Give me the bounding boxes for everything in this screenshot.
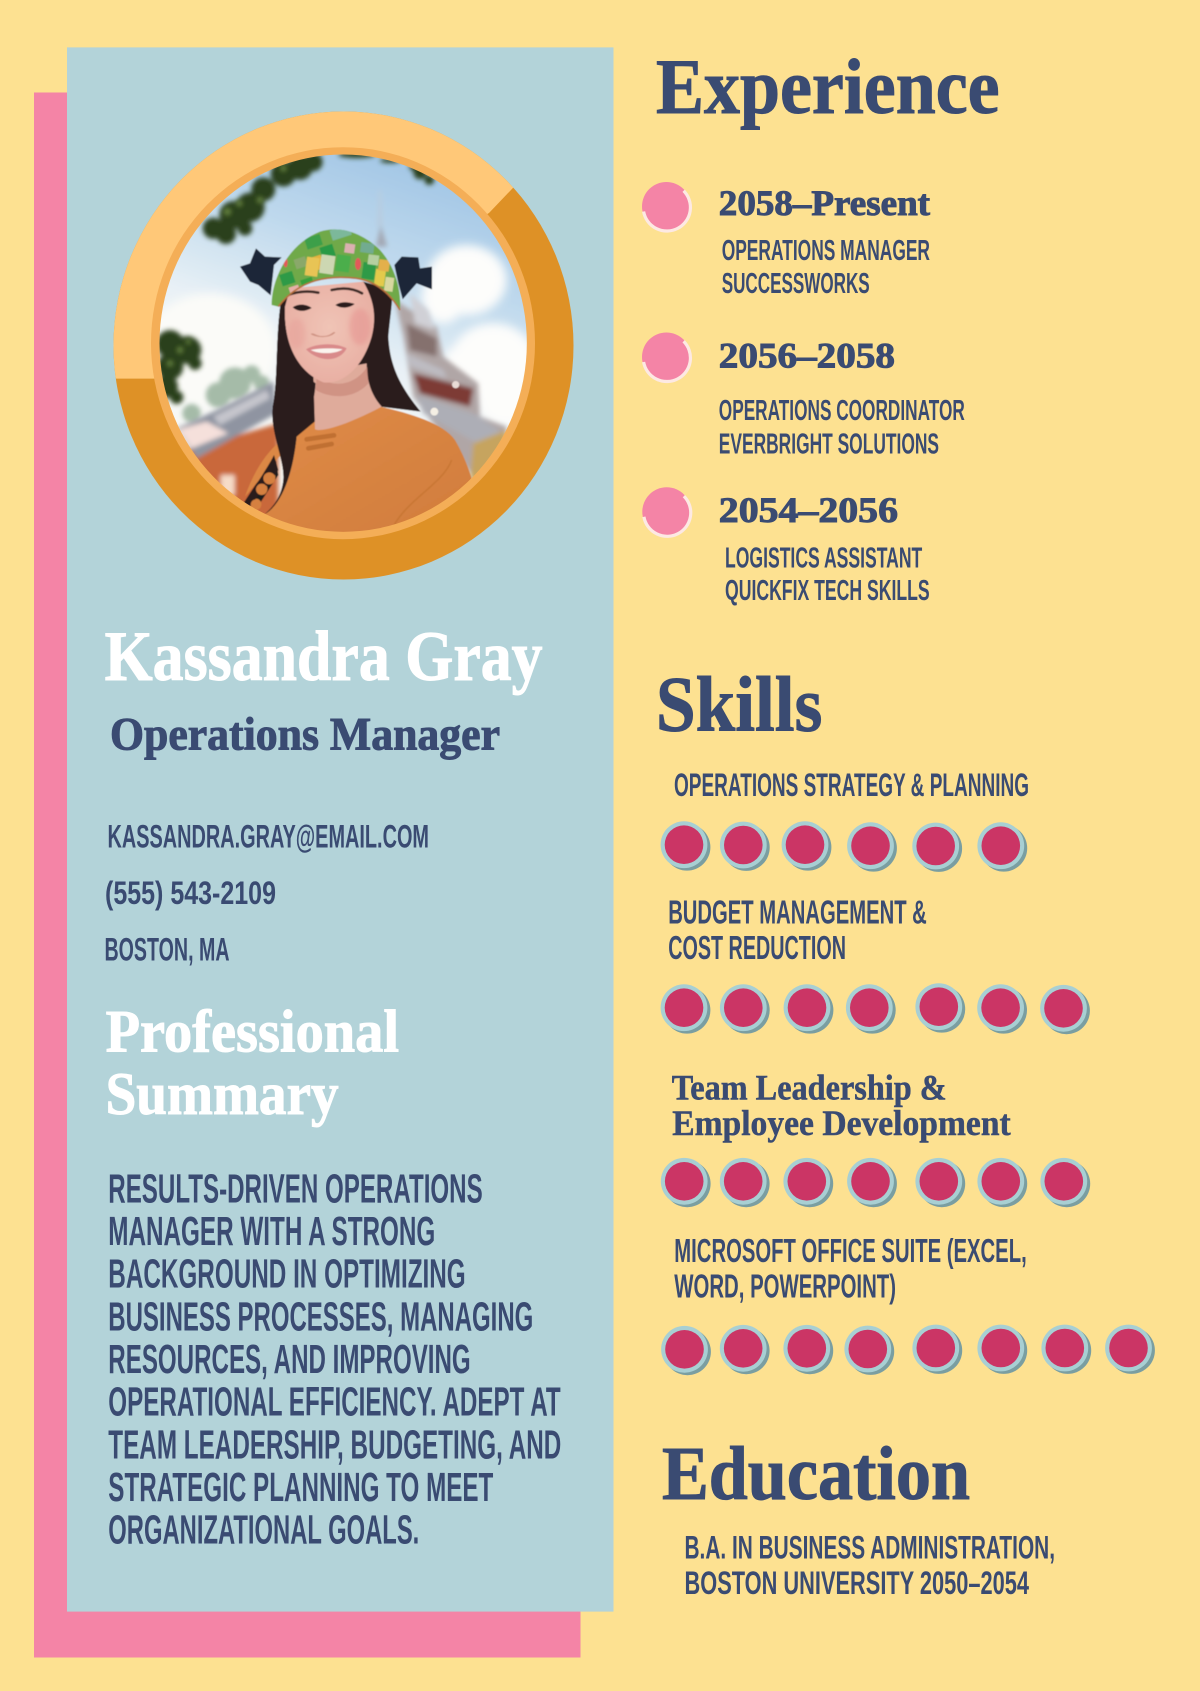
left front hair strand — [265, 297, 316, 514]
experience entry 3 — [642, 487, 930, 607]
timeline dot — [642, 332, 691, 382]
skill label: budget management: COST REDUCTION — [668, 929, 846, 966]
summary paragraph: OPERATIONAL EFFICIENCY. ADEPT AT — [108, 1379, 561, 1425]
education details — [684, 1529, 1055, 1601]
skill label: team leadership: Employee Development — [672, 1103, 1011, 1143]
heading: experience: Experience — [656, 43, 1000, 130]
role and company — [725, 542, 930, 607]
contact details — [104, 818, 429, 968]
portrait illustration — [160, 154, 527, 532]
skill label: microsoft office: WORD, POWERPOINT) — [674, 1268, 896, 1304]
skill label: microsoft office — [674, 1232, 1027, 1304]
role and company: SUCCESSWORKS — [722, 268, 870, 300]
timeline dot — [642, 182, 691, 231]
experience entry 2 — [642, 332, 965, 460]
profile photo with ring — [114, 112, 574, 580]
hair — [265, 282, 421, 514]
summary paragraph: TEAM LEADERSHIP, BUDGETING, AND — [108, 1421, 561, 1467]
skill rating: microsoft office — [661, 1325, 1155, 1375]
heading: professional summary — [106, 999, 399, 1127]
role and company: OPERATIONS COORDINATOR — [719, 395, 965, 427]
role and company: EVERBRIGHT SOLUTIONS — [719, 428, 939, 460]
face — [285, 282, 374, 383]
skill label: team leadership — [672, 1067, 1011, 1143]
dates: 2054–2056 — [719, 490, 898, 530]
timeline dot — [642, 487, 691, 536]
skill label: budget management: BUDGET MANAGEMENT & — [668, 893, 927, 930]
skill label: budget management — [668, 893, 927, 966]
experience entry 1 — [642, 182, 930, 300]
strap and knots — [244, 461, 279, 506]
skill rating: budget management — [661, 983, 1090, 1034]
neck — [313, 363, 382, 430]
summary paragraph: BACKGROUND IN OPTIMIZING — [108, 1251, 466, 1297]
ring: dark segment — [114, 112, 574, 580]
summary paragraph: STRATEGIC PLANNING TO MEET — [108, 1464, 493, 1510]
education details: BOSTON UNIVERSITY 2050–2054 — [684, 1565, 1029, 1601]
summary paragraph: MANAGER WITH A STRONG — [108, 1208, 435, 1254]
role and company — [722, 235, 930, 300]
heading: education: Education — [662, 1432, 970, 1516]
role and company: QUICKFIX TECH SKILLS — [725, 575, 930, 607]
email: KASSANDRA.GRAY@EMAIL.COM — [108, 818, 429, 854]
sweater — [245, 407, 472, 540]
ring: light segment — [114, 112, 513, 379]
heading: professional summary: Professional — [106, 999, 399, 1065]
blue sidebar panel — [67, 47, 614, 1612]
skill label: team leadership: Team Leadership & — [672, 1067, 947, 1107]
job title: Operations Manager — [110, 708, 500, 760]
role and company: OPERATIONS MANAGER — [722, 235, 930, 267]
summary paragraph: BUSINESS PROCESSES, MANAGING — [108, 1293, 533, 1339]
dates: 2058–Present — [719, 183, 930, 223]
mosaic hat — [271, 228, 401, 311]
ring: inner band — [151, 147, 535, 539]
mouth — [306, 344, 347, 359]
role and company: LOGISTICS ASSISTANT — [725, 542, 923, 574]
role and company — [719, 395, 965, 460]
name: Kassandra Gray — [105, 618, 543, 696]
phone: (555) 543-2109 — [105, 875, 276, 911]
summary paragraph: RESOURCES, AND IMPROVING — [108, 1336, 471, 1382]
brows and eyes — [287, 289, 362, 295]
skill rating: team leadership — [661, 1158, 1090, 1207]
summary paragraph: RESULTS-DRIVEN OPERATIONS — [108, 1166, 483, 1212]
dates: 2056–2058 — [719, 336, 895, 376]
hair bows — [240, 248, 432, 299]
summary paragraph — [108, 1166, 561, 1553]
skill rating: operations strategy — [661, 821, 1027, 872]
pink backing panel — [34, 92, 580, 1658]
heading: skills: Skills — [656, 661, 822, 748]
location: BOSTON, MA — [104, 932, 230, 968]
summary paragraph: ORGANIZATIONAL GOALS. — [108, 1507, 419, 1553]
heading: professional summary: Summary — [106, 1061, 339, 1127]
